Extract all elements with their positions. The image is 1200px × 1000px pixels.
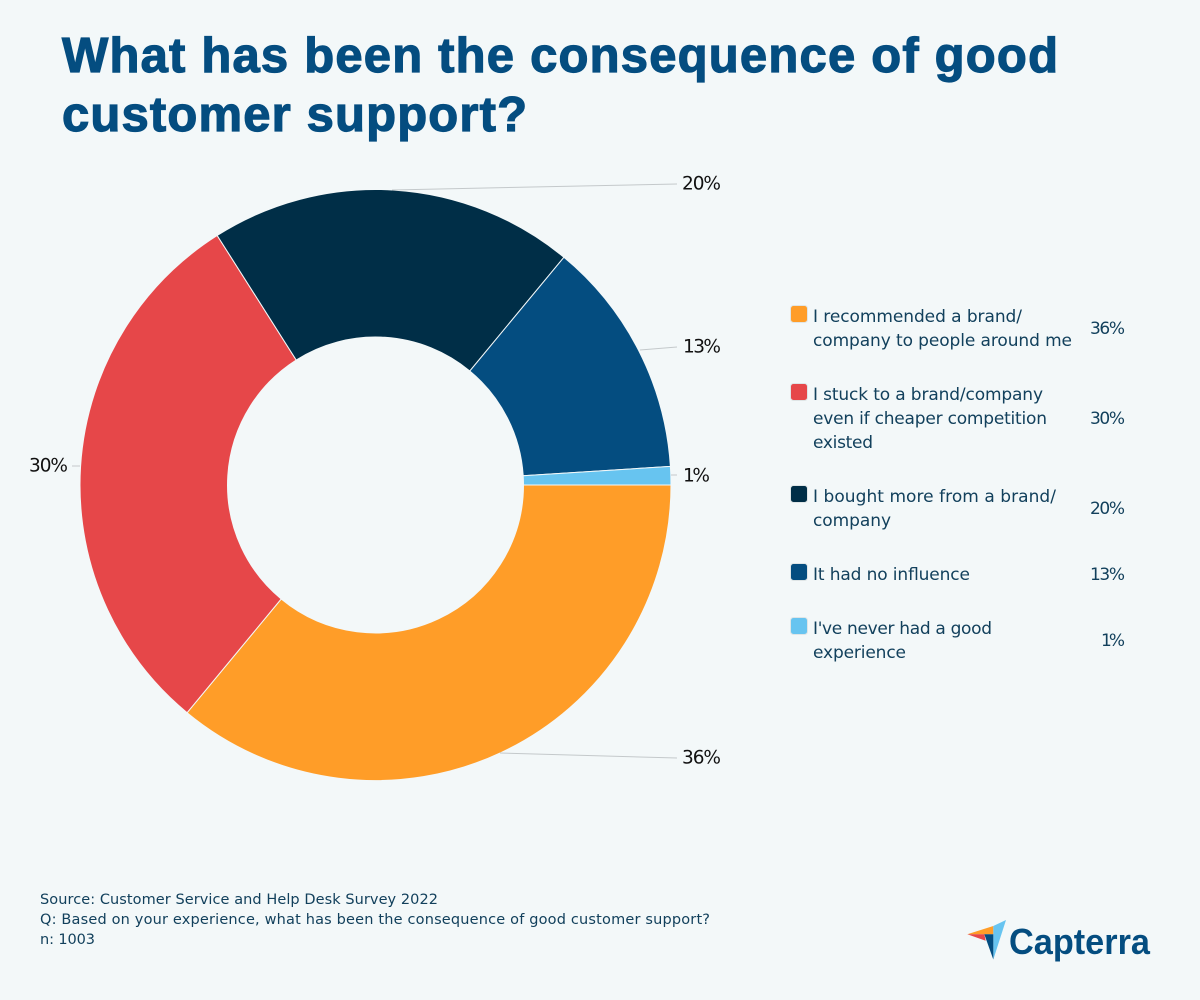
leader lines [72, 184, 677, 758]
legend item: bought more: 20% [1090, 499, 1125, 519]
slice: bought more 20% [217, 189, 564, 371]
slice: no influence 13% [470, 257, 670, 476]
data labels [29, 174, 721, 768]
wordmark: Capterra [1009, 921, 1151, 962]
legend item: recommended [790, 306, 1125, 351]
title: customer support? [62, 88, 527, 142]
slice: never had 1% [523, 466, 671, 485]
legend [790, 306, 1125, 663]
legend item: bought more: I bought more from a brand/ [813, 487, 1056, 507]
legend item: recommended: 36% [1090, 319, 1125, 339]
icon: logo mark [967, 920, 1006, 960]
legend item: stuck: 30% [1090, 409, 1125, 429]
source note [40, 892, 710, 948]
logo: Capterra [967, 920, 1151, 962]
title: What has been the consequence of good [62, 29, 1058, 83]
title [62, 29, 1058, 142]
donut chart [80, 189, 671, 781]
legend item: stuck: even if cheaper competition [813, 409, 1047, 429]
legend item: stuck [790, 384, 1125, 453]
legend item: no influence [790, 564, 1125, 585]
legend item: no influence: 13% [1090, 565, 1125, 585]
data labels: 1% [683, 466, 710, 486]
data labels: 13% [683, 336, 721, 358]
slice: recommended 36% [187, 485, 671, 781]
data labels: 36% [682, 748, 721, 768]
legend item: recommended: I recommended a brand/ [813, 307, 1022, 327]
legend item: bought more [790, 486, 1125, 531]
legend item: no influence: It had no influence [813, 565, 970, 585]
legend item: never had [790, 618, 1125, 663]
source note: Source: Customer Service and Help Desk Survey 2022 [40, 892, 438, 908]
legend item: stuck: I stuck to a brand/company [813, 385, 1043, 405]
data labels: 30% [29, 456, 68, 476]
legend item: never had: I've never had a good [813, 619, 992, 639]
legend item: recommended: company to people around me [813, 331, 1072, 351]
legend item: never had: 1% [1101, 631, 1125, 651]
source note: Q: Based on your experience, what has been the consequence of good customer support? [40, 912, 710, 928]
legend item: stuck: existed [813, 433, 873, 453]
source note: n: 1003 [40, 932, 95, 948]
legend item: bought more: company [813, 511, 891, 531]
data labels: 20% [682, 174, 721, 194]
slice: stuck 30% [80, 236, 296, 713]
legend item: never had: experience [813, 643, 906, 663]
